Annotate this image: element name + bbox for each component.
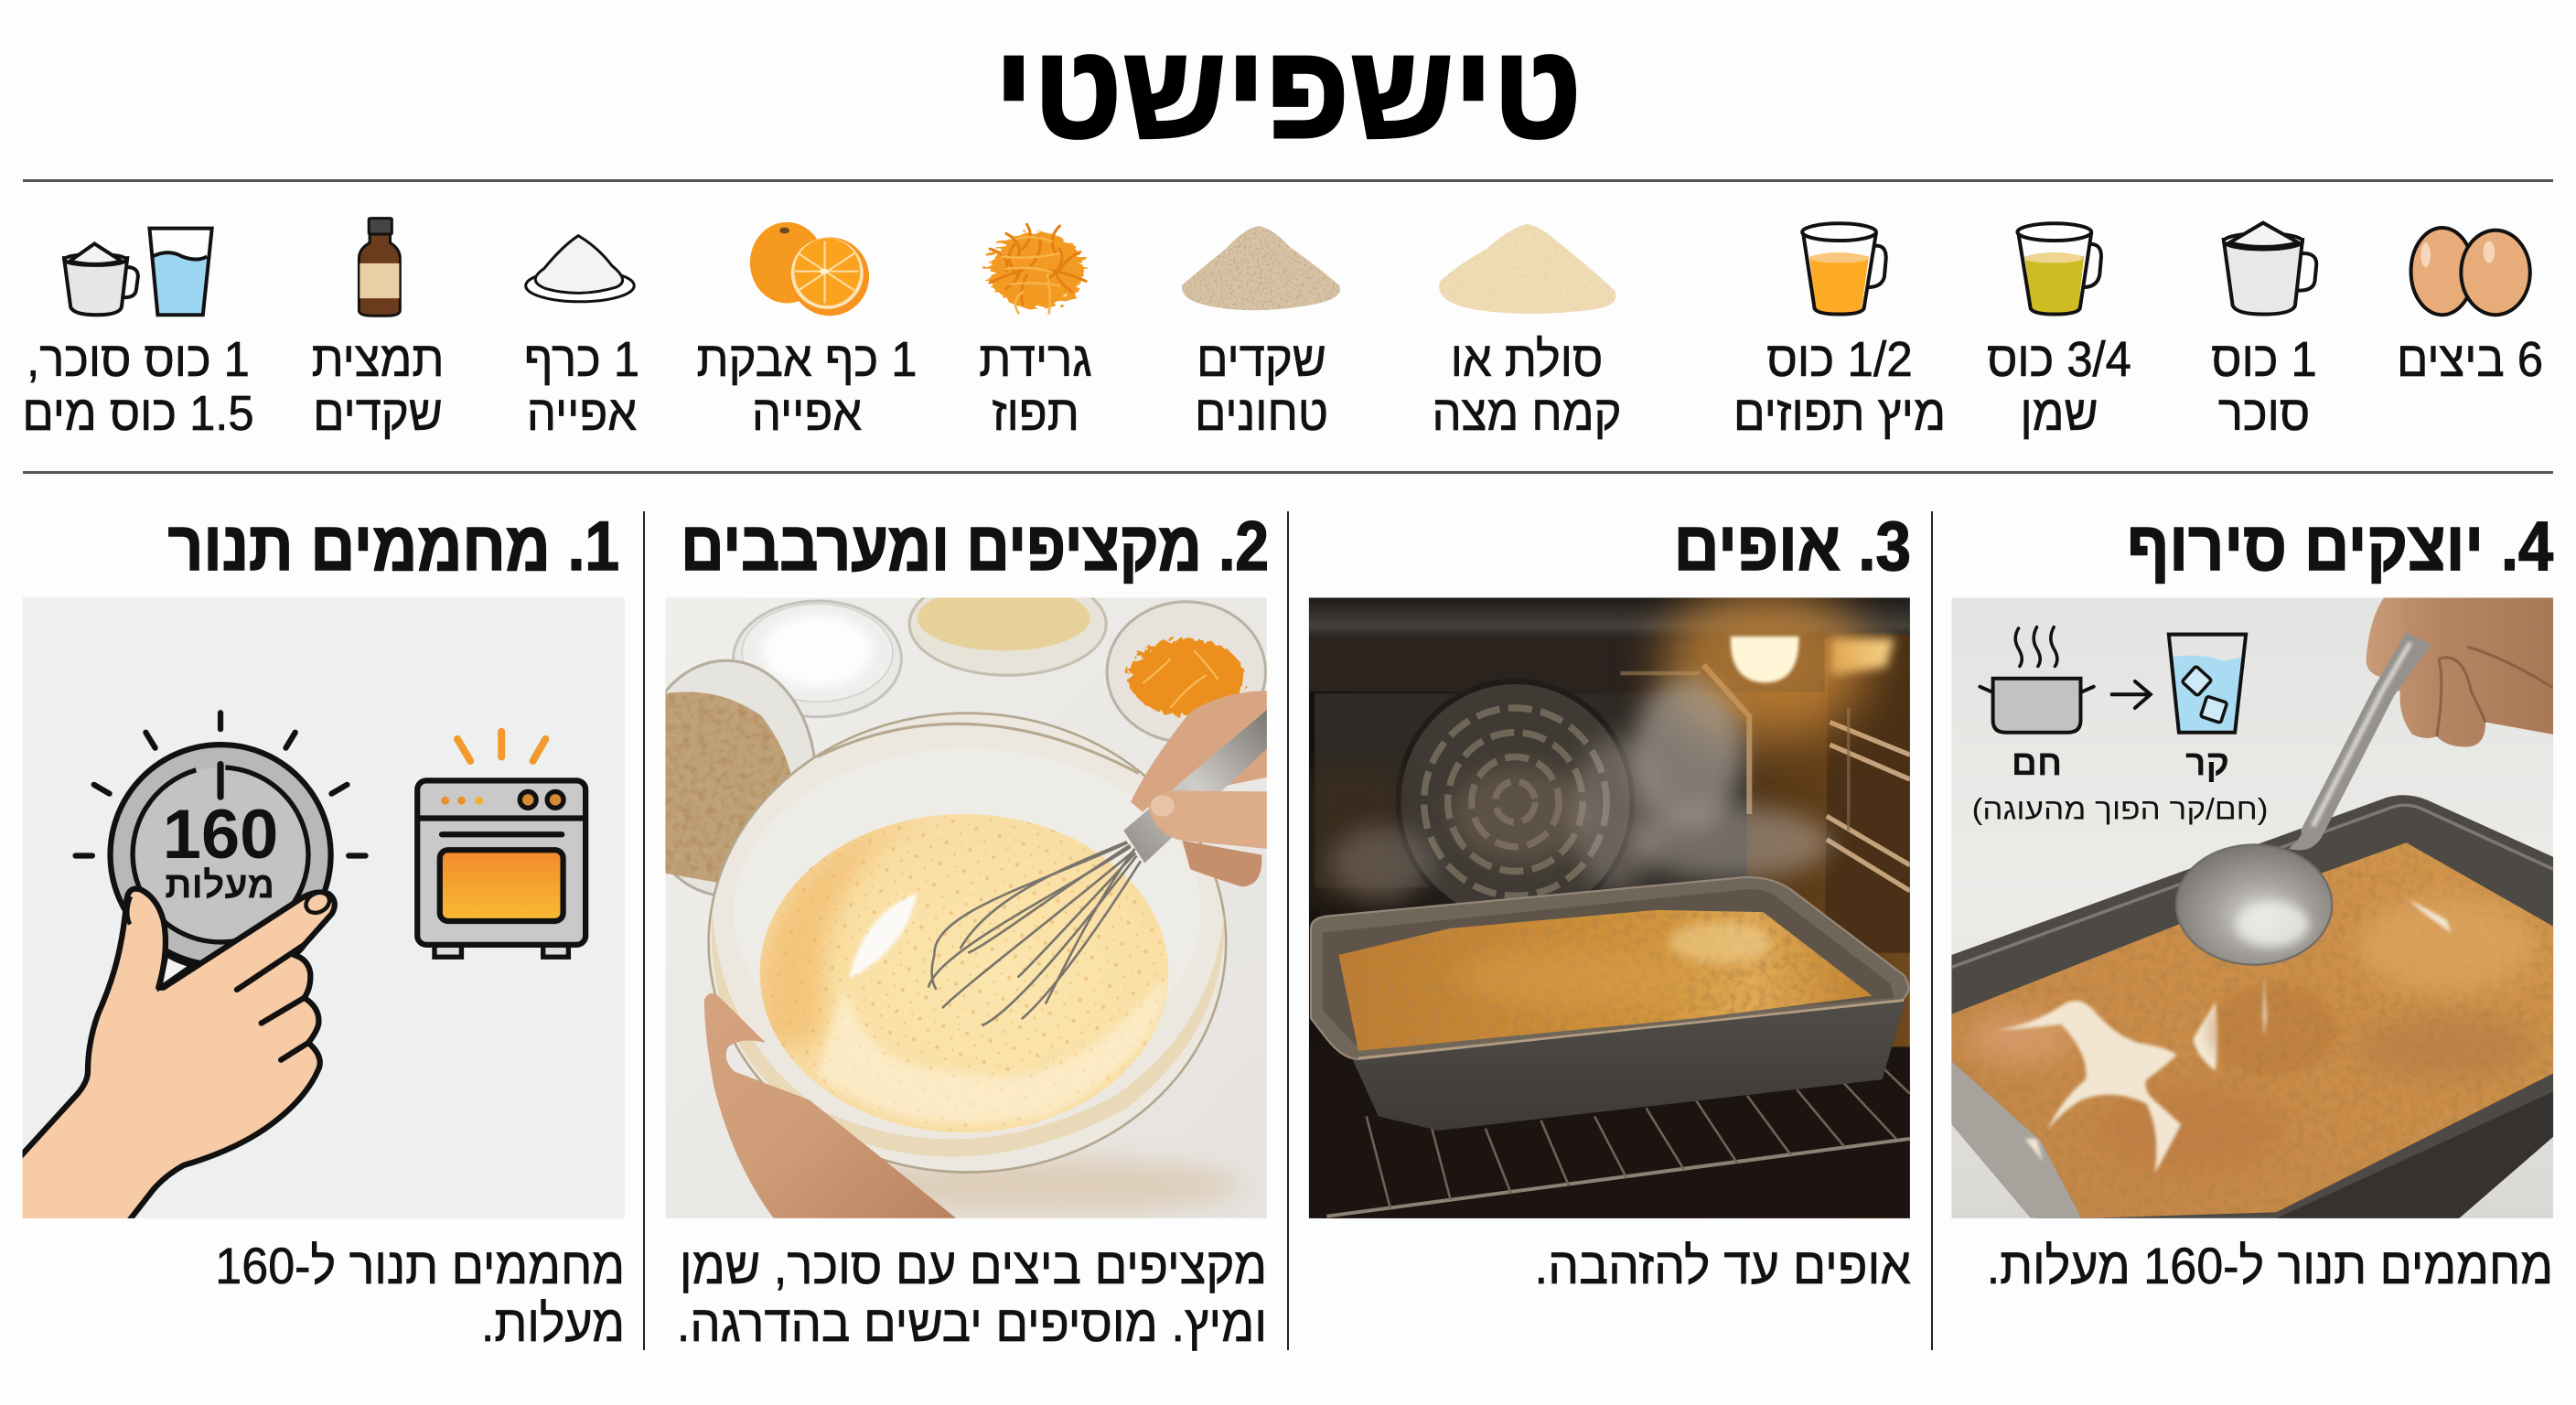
ingredient: 1/2 cup orange juice xyxy=(1733,223,1946,441)
description step 1 xyxy=(215,1238,625,1352)
bottom rack space xyxy=(1309,1046,1910,1218)
heading step 1: 1. מחממים תנור xyxy=(167,508,619,585)
ingredient: ground almonds: טחונים xyxy=(1195,387,1328,441)
icon: pot xyxy=(1993,679,2080,733)
description step 4: מחממים תנור ל-160 מעלות. xyxy=(1987,1238,2553,1294)
ingredient: ground almonds: שקדים xyxy=(1197,333,1326,387)
description step 1: מעלות. xyxy=(481,1295,625,1352)
ingredient: 3/4 cup oil xyxy=(1987,223,2131,441)
label cold: קר xyxy=(2185,744,2229,784)
heading step 3: 3. אופים xyxy=(1674,508,1911,585)
ingredient: 1 cup sugar xyxy=(2211,223,2317,441)
ingredients row xyxy=(22,219,2543,441)
panel: step 1 preheat xyxy=(15,508,625,1352)
column dividers xyxy=(643,511,1933,1350)
oven rack xyxy=(1326,1066,1910,1217)
heading step 2: 2. מקציפים ומערבבים xyxy=(681,509,1269,585)
panel: step 2 whisk and mix xyxy=(637,509,1269,1352)
illustration: dial and oven xyxy=(15,597,625,1227)
ladle xyxy=(2176,632,2431,965)
description step 2 xyxy=(677,1238,1267,1352)
icon: glass of oil xyxy=(2017,223,2101,315)
middle divider xyxy=(23,471,2553,474)
ingredient: 1/2 cup orange juice: 1/2 כוס xyxy=(1766,332,1913,387)
baking pan with cake xyxy=(1311,877,1908,1131)
ingredient: syrup sugar and water: 1.5 כוס מים xyxy=(22,387,254,441)
cake xyxy=(1951,842,2553,1218)
title: טישפישטי xyxy=(994,17,1582,166)
ingredient: orange zest: תפוז xyxy=(992,387,1079,441)
ingredient: syrup sugar and water xyxy=(22,229,254,441)
icon: eggs xyxy=(2411,228,2530,315)
ingredient: 1 cup sugar: 1 כוס xyxy=(2211,333,2317,387)
icon: dial ticks xyxy=(76,713,366,856)
bowl: orange zest xyxy=(1107,602,1266,742)
hand holding whisk xyxy=(1149,790,1267,886)
ingredient: syrup sugar and water: 1 כוס סוכר, xyxy=(27,333,250,387)
icon: sugar mug xyxy=(2224,223,2316,315)
ingredient: 3/4 cup oil: 3/4 כוס xyxy=(1987,333,2131,387)
bowl: semolina xyxy=(907,597,1108,677)
ingredient: baking powder spoon: 1 כף אבקת xyxy=(697,333,917,387)
photo: pouring syrup on cake xyxy=(1951,597,2553,1218)
ingredient: ground almonds xyxy=(1182,226,1340,441)
ingredient: 1 cup sugar: סוכר xyxy=(2218,387,2310,441)
icon: hot pot and cold glass xyxy=(1972,627,2269,826)
icon: orange zest xyxy=(989,224,1086,314)
icon: temperature dial: 160 xyxy=(163,796,278,874)
photo: mixing bowl xyxy=(637,574,1267,1218)
ingredient: orange zest: גרידת xyxy=(979,333,1092,387)
cake colour variation xyxy=(1968,896,2537,1174)
icon: orange xyxy=(750,222,869,316)
ingredient: almond extract: שקדים xyxy=(313,387,443,441)
steam xyxy=(1331,680,1830,900)
panel: step 3 bake xyxy=(1309,508,1911,1294)
description step 2: מקציפים ביצים עם סוכר, שמן xyxy=(680,1238,1267,1294)
whisk xyxy=(928,710,1267,1025)
description step 3: אופים עד להזהבה. xyxy=(1534,1237,1911,1294)
ingredient: semolina or matzo meal: קמח מצה xyxy=(1433,387,1621,441)
ingredient: semolina or matzo meal: סולת או xyxy=(1451,333,1603,387)
photo: cake in oven xyxy=(1309,585,1910,1218)
icon: glass of ice water xyxy=(2169,635,2246,733)
icon: powder on plate xyxy=(526,236,634,302)
heading step 4: 4. יוצקים סירוף xyxy=(2127,509,2553,585)
ingredient: 1/2 cup orange juice: מיץ תפוזים xyxy=(1733,386,1946,441)
hand fingers behind whisk xyxy=(1131,691,1267,812)
ingredient: almond extract: תמצית xyxy=(312,333,444,387)
ingredient: almond extract xyxy=(312,219,444,441)
ingredient: orange zest xyxy=(979,224,1092,441)
ingredient: semolina or matzo meal xyxy=(1433,224,1621,441)
panel: step 4 pour syrup xyxy=(1951,509,2553,1294)
ingredient: baking soda teaspoon: אפייה xyxy=(527,387,637,441)
icon: glass of juice xyxy=(1802,223,1886,315)
right wall xyxy=(1825,635,1910,953)
ingredient: 6 eggs: 6 ביצים xyxy=(2397,333,2543,387)
label hot: חם xyxy=(2012,744,2062,784)
oven back wall and fan xyxy=(1309,665,1749,922)
icon: steam xyxy=(2015,627,2057,666)
bowl: almonds xyxy=(665,659,816,896)
ingredient: baking soda teaspoon: 1 כרף xyxy=(524,333,639,387)
ingredient: baking soda teaspoon xyxy=(524,236,639,441)
icon: temperature dial: מעלות xyxy=(165,863,274,906)
icon: almond pile xyxy=(1182,226,1340,310)
ingredient: baking powder spoon xyxy=(697,222,917,441)
bowl: flour xyxy=(734,601,901,717)
arrow xyxy=(2112,681,2151,708)
hand holding bowl xyxy=(704,993,956,1218)
bowl: batter xyxy=(709,713,1242,1214)
caption: (חם/קר הפוך מהעוגה) xyxy=(1972,794,2269,826)
ingredient: 6 eggs xyxy=(2397,228,2543,387)
icon: semolina pile xyxy=(1439,224,1615,314)
baking pan xyxy=(1951,795,2553,1218)
hand holding ladle xyxy=(2367,597,2553,746)
pan rim highlight xyxy=(1951,805,2553,967)
ingredient: 3/4 cup oil: שמן xyxy=(2020,387,2098,441)
syrup on cake xyxy=(1996,900,2451,1174)
icon: sugar mug and water glass xyxy=(64,229,212,315)
icon: hand xyxy=(15,889,335,1227)
description step 1: מחממים תנור ל-160 xyxy=(215,1238,625,1294)
top divider xyxy=(23,179,2553,182)
oven light xyxy=(1662,585,1868,741)
description step 2: ומיץ. מוסיפים יבשים בהדרגה. xyxy=(677,1295,1267,1352)
pan inner lip xyxy=(1951,1061,2081,1218)
icon: temperature dial xyxy=(111,745,331,965)
ingredient: baking powder spoon: אפייה xyxy=(752,387,862,441)
icon: oven xyxy=(417,732,585,957)
pan front face xyxy=(2276,1092,2553,1218)
icon: bottle xyxy=(359,219,400,316)
